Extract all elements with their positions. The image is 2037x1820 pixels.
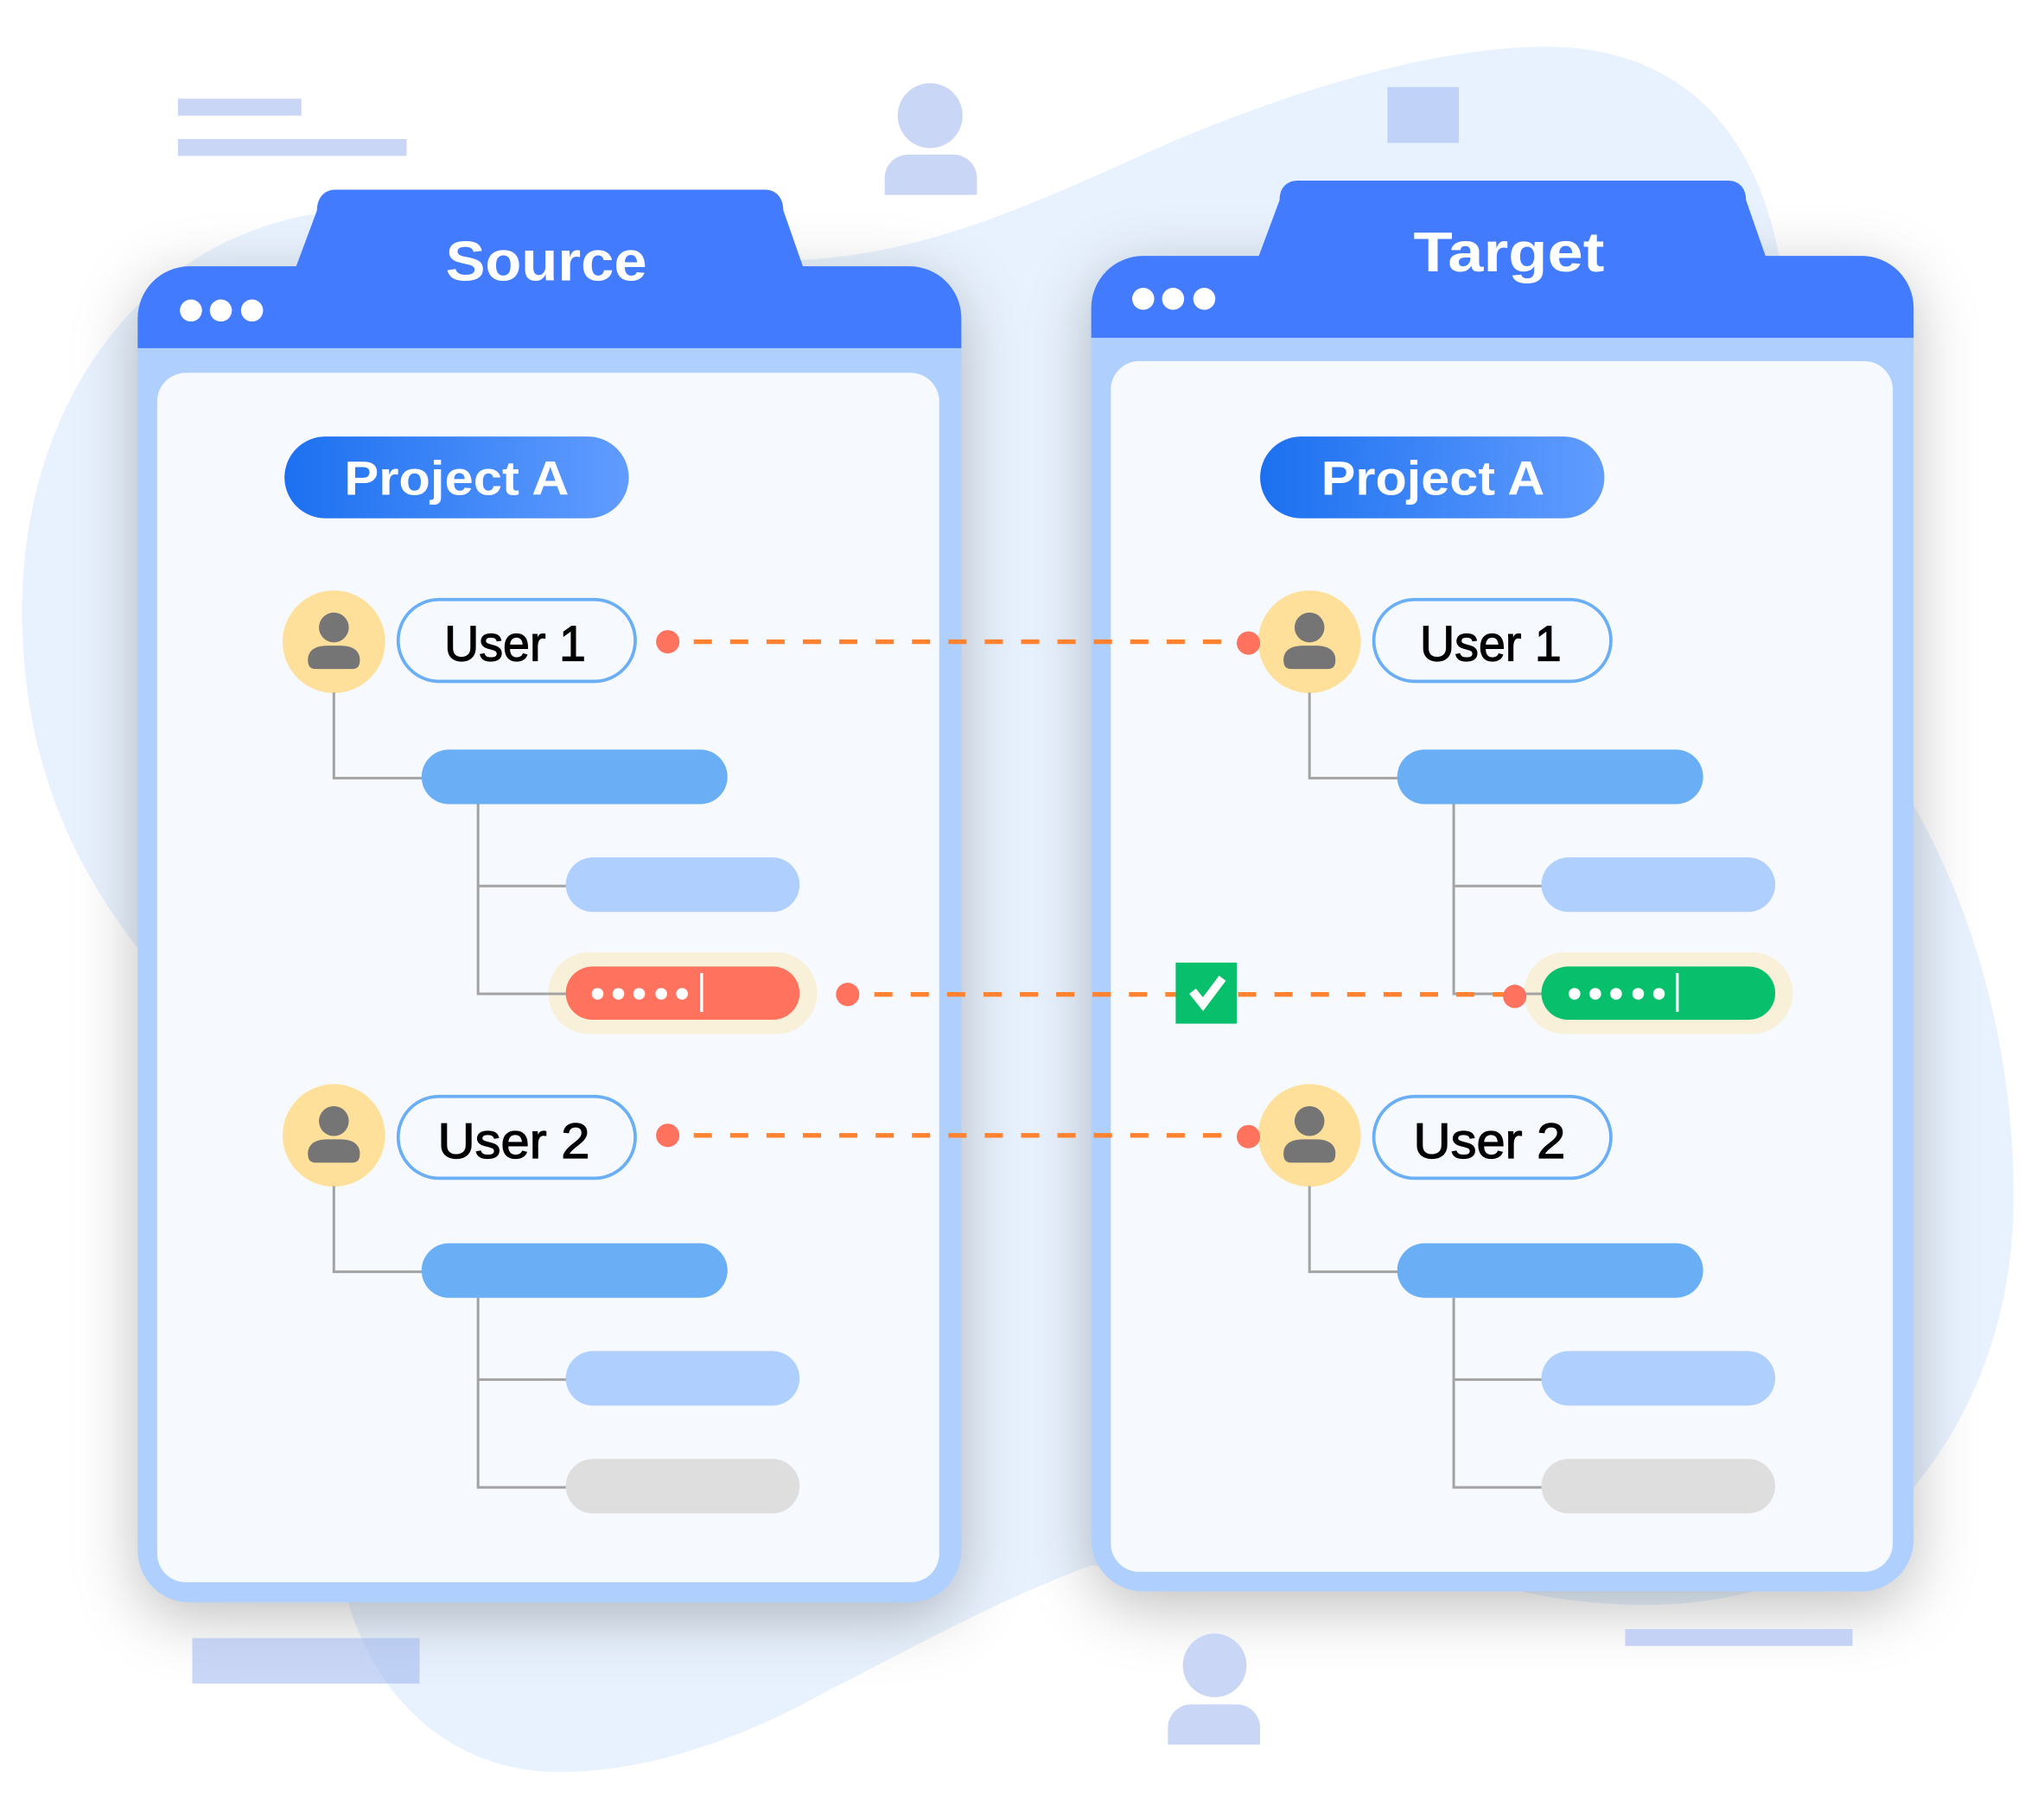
target content card xyxy=(1111,361,1893,1572)
user 2 avatar xyxy=(283,1084,385,1187)
user 2 permission bar xyxy=(566,1351,799,1405)
decoration: bottom-right bar xyxy=(1625,1629,1853,1646)
decoration: top person icon xyxy=(885,83,977,194)
shadow: target panel xyxy=(1092,271,1913,1607)
target heading: Target xyxy=(1413,220,1604,283)
user 2 permission bar xyxy=(1542,1351,1775,1405)
password field: highlight xyxy=(548,952,818,1034)
project pill xyxy=(284,436,629,519)
user 1 label: User 1 xyxy=(444,616,586,671)
connector into password field xyxy=(548,993,566,995)
user 1 role bar xyxy=(422,749,728,804)
window dots xyxy=(1132,288,1215,310)
user 1 role bar xyxy=(1397,749,1703,804)
user 1 avatar xyxy=(1258,590,1361,693)
target header with tab xyxy=(1092,181,1913,338)
user 2 disabled bar xyxy=(566,1459,799,1513)
user 2 role bar xyxy=(422,1244,728,1298)
source frame xyxy=(137,266,961,1602)
user 1 avatar xyxy=(283,590,385,693)
password field: green xyxy=(1542,966,1775,1020)
source heading: Source xyxy=(446,230,647,293)
window dots xyxy=(180,300,263,321)
user 2 label xyxy=(398,1097,635,1178)
arrow: user 1 mapping xyxy=(656,630,1260,655)
decoration: bottom-left rectangle xyxy=(192,1639,420,1683)
user 2 label: User 2 xyxy=(438,1114,589,1169)
user 1 tree connectors xyxy=(1309,692,1542,994)
panel: source xyxy=(137,189,961,1602)
arrow: password mapping xyxy=(836,983,1526,1008)
user 2 role bar xyxy=(1397,1244,1703,1298)
connector into password field xyxy=(1524,993,1542,995)
decoration: top-left text bars xyxy=(178,99,406,156)
user 1 permission bar xyxy=(1542,857,1775,912)
password field: highlight xyxy=(1524,952,1792,1034)
user 2 avatar xyxy=(1258,1084,1361,1187)
shadow: source panel xyxy=(137,282,961,1617)
project pill xyxy=(1260,436,1604,519)
user 2 tree connectors xyxy=(1309,1186,1542,1487)
project pill: Project A xyxy=(344,452,569,506)
user 1 tree connectors xyxy=(334,692,566,994)
decoration: top-right square xyxy=(1387,87,1459,143)
user 2 label: User 2 xyxy=(1413,1114,1565,1169)
decoration: bottom person icon xyxy=(1168,1633,1260,1745)
project pill: Project A xyxy=(1321,452,1544,506)
user 2 label xyxy=(1374,1097,1611,1178)
password field: red xyxy=(566,966,799,1020)
source header with tab xyxy=(137,189,961,348)
user 1 permission bar xyxy=(566,857,799,912)
user 2 tree connectors xyxy=(334,1186,566,1487)
target frame xyxy=(1092,256,1913,1591)
user 1 label: User 1 xyxy=(1420,616,1562,671)
user 1 label xyxy=(1374,600,1611,681)
user 2 disabled bar xyxy=(1542,1459,1775,1513)
source content card xyxy=(157,372,939,1582)
user 1 label xyxy=(398,600,635,681)
arrow: user 2 mapping xyxy=(656,1123,1260,1149)
icon: check mark xyxy=(1175,963,1237,1024)
panel: target xyxy=(1092,181,1913,1591)
